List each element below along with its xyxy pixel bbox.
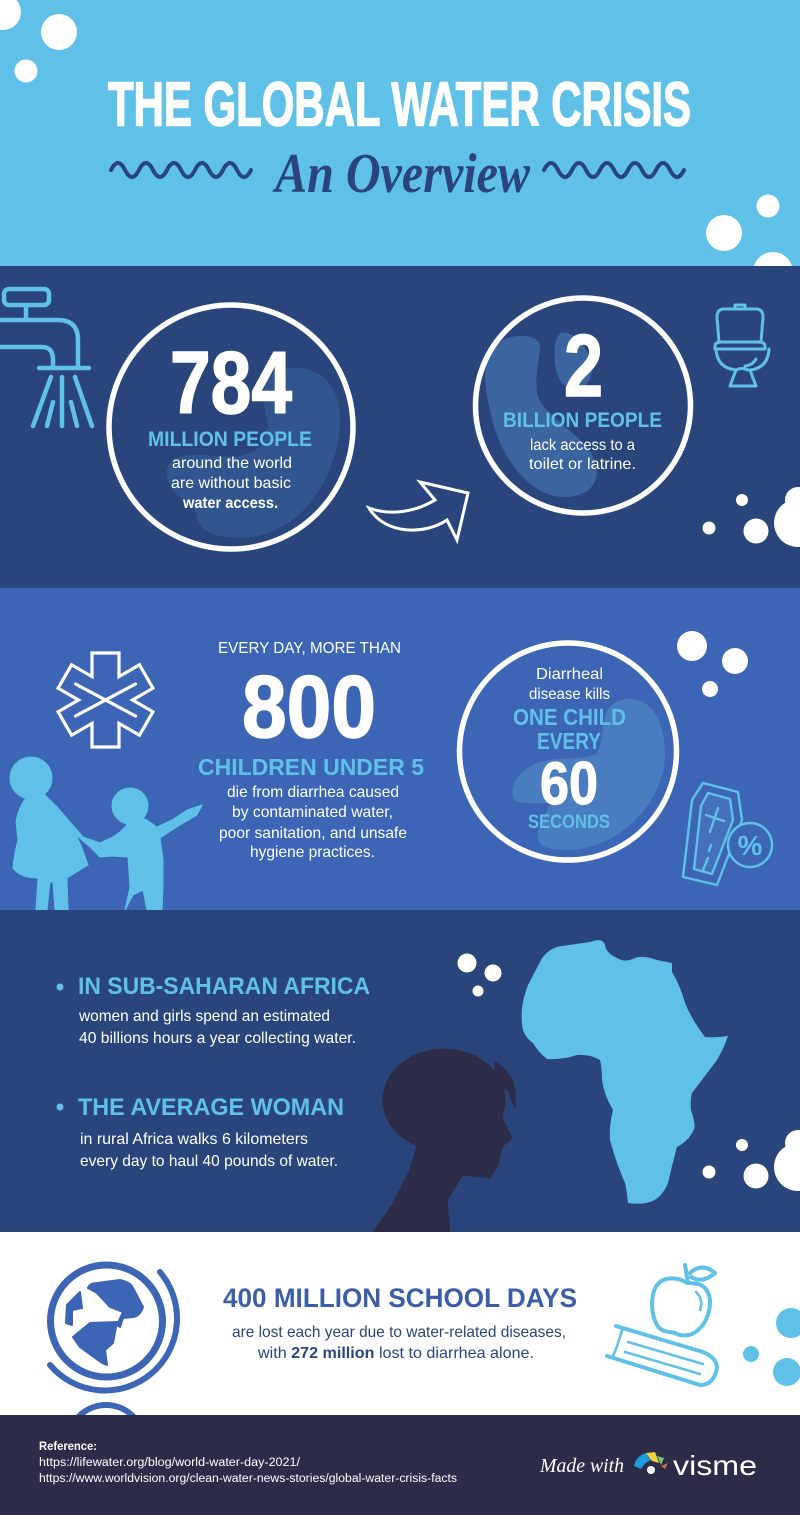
text: references: Reference: <box>39 1441 97 1453</box>
icon: coffin: % <box>738 830 763 861</box>
silhouette: woman <box>373 1049 515 1232</box>
text: references <box>39 1441 457 1485</box>
silhouette: children <box>10 757 202 910</box>
text: lack access <box>529 437 636 473</box>
panel: children deaths <box>0 588 800 910</box>
bubbles: top left <box>0 0 77 82</box>
squiggle: right <box>544 163 684 177</box>
text: rural africa: every day to haul 40 pounds of water. <box>80 1153 338 1170</box>
icon: faucet <box>0 289 92 426</box>
label: billion people: BILLION PEOPLE <box>503 409 662 432</box>
bubbles: section three <box>677 631 748 697</box>
text: lost each year <box>232 1324 566 1362</box>
bubbles: bottom right <box>702 1130 800 1191</box>
icon: star of life <box>58 653 153 747</box>
text: diarrheal disease: disease kills <box>529 686 610 703</box>
icon: toilet <box>715 305 769 386</box>
bubbles: section two <box>702 487 800 547</box>
stat: 784: 784 <box>170 333 292 432</box>
heading: average woman: THE AVERAGE WOMAN <box>78 1094 344 1121</box>
text: lost each year: are lost each year due to water-related diseases, <box>232 1324 566 1341</box>
text: die from diarrhea: by contaminated water, <box>232 804 393 821</box>
text: lack access: lack access to a <box>530 437 635 454</box>
blob: circle one <box>167 368 340 538</box>
panel: footer <box>0 1415 800 1515</box>
text: references: https://www.worldvision.org/clean-water-news-stories/global-water-crisis-facts <box>39 1473 457 1485</box>
panel: africa <box>0 910 800 1232</box>
stat: 2: 2 <box>564 316 603 415</box>
bullet: sub-saharan africa <box>56 973 370 1047</box>
panel: header <box>0 0 800 292</box>
label: seconds: SECONDS <box>528 812 610 833</box>
label: one child every: EVERY <box>537 728 601 754</box>
text: visme: visme <box>673 1450 757 1481</box>
text: die from diarrhea: poor sanitation, and unsafe <box>219 825 407 842</box>
text: lack access: toilet or latrine. <box>529 456 636 473</box>
label: million people: MILLION PEOPLE <box>148 428 312 451</box>
blob: circle three <box>513 699 665 850</box>
squiggle: left <box>111 163 251 177</box>
circle: 784 million people <box>109 305 353 549</box>
bubbles: section five <box>743 1308 800 1386</box>
text: lost each year: with 272 million lost to diarrhea alone. <box>257 1345 534 1362</box>
subtitle: An Overview <box>272 143 531 205</box>
icon: apple and book <box>607 1265 717 1385</box>
label: one child every: ONE CHILD <box>513 704 626 730</box>
text: diarrheal disease <box>529 666 610 703</box>
heading: sub-saharan africa: IN SUB-SAHARAN AFRICA <box>78 973 370 1000</box>
panel: water and toilet access <box>0 266 800 588</box>
text: around the world <box>171 455 292 512</box>
text: rural africa: in rural Africa walks 6 kilometers <box>80 1131 308 1148</box>
icon: globe <box>50 1265 177 1481</box>
heading: school days: 400 MILLION SCHOOL DAYS <box>223 1283 577 1313</box>
text: around the world: around the world <box>172 455 292 472</box>
icon: visme logo <box>634 1452 668 1474</box>
text: die from diarrhea: hygiene practices. <box>250 844 375 861</box>
text: made with: Made with <box>539 1455 624 1477</box>
bubbles: thought <box>458 954 502 996</box>
label: children under 5: CHILDREN UNDER 5 <box>198 754 424 780</box>
blob: circle two <box>485 333 597 497</box>
arrow <box>369 482 468 540</box>
stat: 800: 800 <box>242 657 376 756</box>
label: one child every <box>513 704 626 754</box>
circle: one child every 60 seconds <box>460 643 676 860</box>
bubbles: bottom right <box>706 194 793 292</box>
text: around the world: are without basic <box>171 475 291 492</box>
text: diarrheal disease: Diarrheal <box>536 666 603 683</box>
icon: coffin <box>683 783 772 885</box>
map: africa <box>522 940 728 1204</box>
stat: 60: 60 <box>540 750 598 817</box>
text: women and girls: women and girls spend an estimated <box>78 1008 330 1025</box>
text: every day: EVERY DAY, MORE THAN <box>218 640 401 657</box>
text: rural africa <box>80 1131 338 1170</box>
text: references: https://lifewater.org/blog/world-water-day-2021/ <box>39 1457 301 1469</box>
text: die from diarrhea <box>219 784 407 861</box>
text: women and girls <box>78 1008 356 1047</box>
text: women and girls: 40 billions hours a year collecting water. <box>79 1030 356 1047</box>
panel: school days <box>0 1232 800 1481</box>
circle: 2 billion people <box>476 298 690 513</box>
text: die from diarrhea: die from diarrhea caused <box>227 784 399 801</box>
text: around the world: water access. <box>182 495 278 512</box>
bullet: average woman <box>56 1094 344 1170</box>
